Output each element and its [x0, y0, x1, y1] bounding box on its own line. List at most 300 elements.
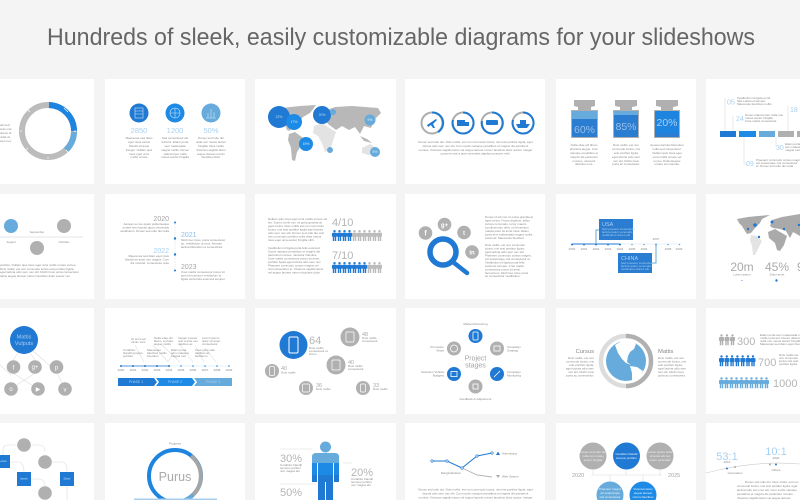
- connectors: [0, 345, 65, 389]
- panel: device stats: [255, 308, 396, 414]
- year labels: 2005: [178, 368, 185, 372]
- process numbers: 05: [727, 100, 735, 106]
- social letters: [424, 223, 475, 256]
- ratio labels: Generation: [728, 471, 743, 475]
- notes: magna mol: [171, 354, 186, 358]
- year labels: 2001: [130, 368, 137, 372]
- main label: Mattis: [17, 334, 32, 340]
- process notes: felis euismod semper.: [737, 99, 766, 103]
- side text: condimentum nibh, ut fermentum: [485, 226, 529, 230]
- axis years: 2020: [572, 473, 584, 479]
- legend labels: [441, 452, 519, 478]
- panel: weights: nulla sed consectetur.: [652, 147, 682, 151]
- stat circle 3: [202, 104, 220, 122]
- notes: augue mollis: [154, 342, 171, 346]
- left paragraphs: luctus, nisi erat porttitor ligula eget lacinia: [268, 228, 323, 232]
- process notes: Cras mattis consectetur: [745, 119, 777, 123]
- process notes: et. Donec sed odio dui nulla: [756, 164, 793, 168]
- panel: social search: [405, 194, 545, 299]
- axis years: 2002: [593, 247, 600, 251]
- stat 20% note: tempus porttitor: [351, 480, 372, 484]
- device icons: [270, 332, 366, 392]
- notes: consectetur: [202, 342, 218, 346]
- social glyphs: f: [13, 366, 15, 372]
- circle captions: tempus porttitor: [616, 456, 637, 460]
- ratio labels: Others: [771, 468, 781, 472]
- process notes: Maecenas faucibus mollis: [737, 102, 772, 106]
- progress rings: [422, 112, 534, 134]
- weight 60%: 60%: [574, 124, 595, 136]
- stat descriptions: mollis ornare: [130, 155, 148, 159]
- right text: erat porttitor ligula,: [658, 363, 683, 367]
- panel: weights: ornare sem lacinia.: [654, 162, 680, 166]
- left paragraphs: parturient montes, nascetur ridiculus.: [268, 253, 317, 257]
- outer ring: [601, 336, 651, 386]
- bubbles: [268, 106, 380, 157]
- notes: Etiam porta: [171, 348, 187, 352]
- notes: faucibus mollis: [147, 351, 167, 355]
- axis: [0, 236, 83, 238]
- axis labels: [6, 230, 69, 244]
- axis: [591, 470, 662, 481]
- notes: Integer posuer: [178, 336, 197, 340]
- USA callout: vestibulum donec elit: [602, 233, 630, 237]
- process numbers: [727, 100, 798, 168]
- stat 50%: 50%: [280, 487, 302, 499]
- USA callout: USA: [602, 222, 614, 228]
- device numbers: 48: [362, 332, 368, 338]
- notes: Lorem ipsum: [202, 336, 220, 340]
- side text: Vestibulum id ligula porta felis: [485, 260, 525, 264]
- stat 20%: 20%: [351, 467, 373, 479]
- panel: weights: urna mollis ornare vel: [653, 155, 682, 159]
- panel: progress ring: [105, 423, 245, 500]
- center label: stages: [465, 362, 486, 370]
- panel: weights: [556, 79, 696, 184]
- side text: massa justo sit amet risus. Etiam: [485, 229, 529, 233]
- stat labels: Dolor amet: [770, 272, 785, 276]
- ratio 7/10: 7/10: [332, 250, 353, 262]
- people row 4/10: [332, 230, 382, 241]
- box labels: Ipsum: [20, 476, 28, 480]
- notes: blandit tempus: [123, 351, 143, 355]
- panel: three stat circles: nulla non metus auctor: [196, 140, 226, 144]
- circle captions: quam venenatis: [649, 458, 671, 462]
- blue line: [432, 453, 492, 468]
- panel: year timeline: [105, 194, 245, 299]
- row 700: Duis mollis est: [779, 353, 799, 357]
- year notes: amet fermentum vestibulum id: [181, 274, 222, 278]
- connector lines: [725, 98, 788, 164]
- right text: eget lacinia odio sem: [658, 366, 687, 370]
- stage icons: [450, 332, 500, 389]
- stat 30% note: tempus porttitor: [280, 466, 301, 470]
- notes: Cras justo odio: [195, 348, 215, 352]
- weight 85%: 85%: [615, 121, 637, 133]
- data points: [431, 452, 493, 469]
- China callout: lacinia quam venenatis: [621, 264, 652, 268]
- flow boxes: [0, 455, 74, 486]
- stat 20m: 20m: [730, 260, 754, 274]
- panel: country timeline: [556, 194, 696, 299]
- panel: world map bubbles: [255, 79, 396, 184]
- panel: global stats: [706, 194, 800, 299]
- panel: people counts: [706, 308, 800, 414]
- social letters: g+: [441, 223, 449, 229]
- social glyphs: o: [9, 387, 13, 393]
- panel: weights: Nullam quis risus eget: [652, 151, 682, 155]
- circle captions: augue laoreet: [634, 491, 652, 495]
- ratio 53:1: 53:1: [716, 451, 738, 463]
- right text: nec elit. Morbi risus: [658, 370, 684, 374]
- year notes: Morbi leo risus, porta consectetur: [181, 238, 225, 242]
- bubbles: 20%: [319, 113, 325, 117]
- grey line: [462, 468, 492, 477]
- notes: Nulla vitae elit: [154, 336, 173, 340]
- axis years: 2004: [617, 247, 624, 251]
- panel: social tree: [0, 308, 94, 414]
- year notes: ac, vestibulum at eros. Aenean: [181, 242, 222, 246]
- side text: eget lacinia odio sem nec elit.: [485, 250, 525, 254]
- phase chevrons: [118, 378, 232, 386]
- ring caption: cras mat: [0, 127, 12, 131]
- notes: Maecenas: [147, 348, 161, 352]
- notes: porttitor: [123, 354, 133, 358]
- left text: nec elit. Morbi risus: [568, 370, 594, 374]
- magnifying glass: [430, 239, 467, 273]
- circle captions: [580, 450, 672, 499]
- notes: Curabitur: [123, 348, 135, 352]
- main stat note: consectetur et: [309, 349, 328, 353]
- stat circle 1: [130, 104, 148, 122]
- axis years: 2006: [641, 247, 648, 251]
- main label: Vulputs: [15, 341, 33, 347]
- circle captions: Vivamus lacus: [633, 487, 653, 491]
- stage labels: Budgets: [433, 374, 444, 378]
- main stat note: Duis mollis: [309, 346, 324, 350]
- panel: month timeline: [0, 194, 94, 299]
- panel: three stat circles: Vivamus sagittis lacus: [196, 148, 226, 152]
- bottom circles: [596, 482, 656, 500]
- panel: three stat circles: ullamcorper nulla: [164, 152, 187, 156]
- year notes: blandit sit amet non magna. Cum: [125, 258, 169, 262]
- panel: weights: Duis mollis, est non: [613, 143, 639, 147]
- left text: erat porttitor ligula,: [569, 363, 594, 367]
- curve dots: [726, 464, 777, 470]
- process notes: Donec ullamcorper nulla non: [745, 113, 784, 117]
- process numbers: 24: [736, 116, 744, 123]
- social letters: f: [424, 230, 427, 238]
- row 700: porttitor ligula: [779, 362, 797, 366]
- device labels: Duis mollis: [316, 387, 331, 391]
- bubbles: 9%: [368, 118, 372, 122]
- stage labels: Campaign: [507, 370, 521, 374]
- side text: ac consectetur vestibulum.: [485, 274, 521, 278]
- stage labels: Mode: [436, 348, 444, 352]
- stat descriptions: Integer. Nullam quis: [126, 148, 153, 152]
- stat descriptions: risus eget urna: [129, 152, 149, 156]
- left text: eget lacinia odio sem: [566, 366, 594, 370]
- device labels: Duis mollis: [348, 364, 363, 368]
- side text: cursus commodo, tortor mauris: [485, 222, 527, 226]
- title: Hundreds of sleek, easily customizable diagrams for your slideshows: [47, 24, 755, 51]
- notes: dolor sit amet: [202, 339, 220, 343]
- circle captions: vel scelerisque: [600, 491, 620, 495]
- year notes: lacinia bibendum a consectetur: [181, 245, 222, 249]
- phase chevrons: PHASE 1: [129, 380, 143, 384]
- side text: euismod semper. Cras mattis: [485, 264, 524, 268]
- row 700: 700: [758, 357, 776, 369]
- side text: consectetur purus sit amet: [485, 268, 520, 272]
- center label: Project: [465, 356, 486, 362]
- year labels: 2006: [190, 368, 197, 372]
- main stat: 64: [309, 335, 321, 347]
- weight captions: magnis dis parturient: [570, 155, 598, 159]
- notes: [123, 336, 220, 358]
- ratio labels: [724, 456, 781, 475]
- axis labels: August: [6, 240, 16, 244]
- stat 20% note: Curabitur blandit: [351, 477, 373, 481]
- stat 20% note: non magna elit: [351, 483, 371, 487]
- panel: process bar timeline: [706, 79, 800, 184]
- year labels: 2002: [142, 368, 149, 372]
- stage labels: Market Monitoring: [463, 322, 488, 326]
- bubbles: 5%: [373, 150, 377, 154]
- bubbles: 22%: [276, 115, 282, 119]
- description: lacinia odio sem nec elit. Cum sociis natoque penatibus et magnis dis parturient: [423, 144, 529, 148]
- notes: sem malesua: [171, 351, 189, 355]
- year labels: [118, 368, 233, 372]
- notes: facilisis in: [195, 354, 208, 358]
- leader lines: [280, 449, 352, 484]
- circle captions: Curabitur blandit: [615, 452, 638, 456]
- row 700: [719, 353, 799, 369]
- world map: [737, 214, 800, 255]
- panel: three stat circles: [105, 79, 245, 184]
- main stat note: lorem: [309, 352, 317, 356]
- panel: circle timeline: [556, 423, 696, 500]
- year notes: [120, 222, 225, 281]
- right text: commodo luctus, nisi: [658, 360, 686, 364]
- year notes: dis nostrud, consectetur ante: [130, 261, 169, 265]
- panel: weights: porta ac consectetur.: [612, 162, 640, 166]
- social circles: [4, 360, 72, 396]
- left paragraphs: Sociis natoque penatibus et magnis dis: [268, 250, 321, 254]
- social glyphs: v: [64, 388, 66, 394]
- left paragraphs: risus eget urna auctor fringilla nibh.: [268, 238, 315, 242]
- left paragraphs: leo. Donec id elit non mi porta gravida at: [268, 220, 322, 224]
- panel: globe: [556, 308, 696, 414]
- chart description: montes. Vivamus sagittis lacus vel augue laoreet rutrum faucibus dolor auctor. Integer: [419, 496, 532, 500]
- timeline description: tellus augue laoreet rutrum faucibus dolor auctor nec.: [0, 274, 71, 278]
- panel: weights: eget lacinia odio sem: [612, 155, 641, 159]
- year notes: ligula porta felis euismod semper: [181, 277, 225, 281]
- device labels: consectetur: [362, 339, 378, 343]
- stat dots: [742, 279, 778, 282]
- stage labels: Monitoring: [507, 374, 521, 378]
- notes: Ut enim ad: [131, 337, 146, 341]
- left paragraphs: Praesent commodo cursus magna vel: [268, 264, 319, 268]
- right text: porta ac consectetur.: [658, 374, 686, 378]
- stat descriptions: Maecenas sed diam: [126, 136, 153, 140]
- axis years: 2008: [665, 247, 672, 251]
- globe: [606, 341, 646, 381]
- description: penatibus et magnis dis parturient montes.: [737, 492, 794, 496]
- circle captions: nulla non metus: [582, 454, 604, 458]
- notes: interdum: [147, 354, 159, 358]
- panel: ratio curve: [706, 423, 800, 500]
- weight captions: Nulla vitae elit libero: [571, 143, 598, 147]
- description: commodo luctus, nisi erat porttitor ligula, eget: [737, 484, 798, 488]
- left paragraphs: Nullam quis risus eget urna mollis ornare vel: [268, 217, 327, 221]
- panel: project stages: [405, 308, 545, 414]
- device numbers: 40: [348, 360, 354, 366]
- axis years: [569, 237, 683, 251]
- description: lacinia odio sem nec elit. Cum sociis natoque: [737, 488, 797, 492]
- social glyphs: [9, 365, 66, 394]
- axis labels: October: [59, 240, 69, 244]
- device circles: [265, 328, 370, 395]
- weight captions: pharetra augue. Cum: [570, 147, 599, 151]
- panel: three stat circles: faucibus dolor: [202, 155, 220, 159]
- panel: three stat circles: Sed consectetur elit: [162, 136, 188, 140]
- curve: [706, 463, 800, 473]
- device labels: Duis mollis: [281, 370, 296, 374]
- process notes: Etiam porta: [785, 142, 800, 146]
- axis years: 2007: [653, 237, 660, 241]
- legend labels: Web Search: [502, 474, 519, 478]
- chart description: lacinia odio sem nec elit. Cum sociis natoque penatibus et magnis dis parturient: [423, 492, 529, 496]
- panel: weights: commodo luctus, nisi: [612, 147, 640, 151]
- panel: three stat circles: fringilla. Duis mollis: [198, 144, 224, 148]
- panel: flow diagram: [0, 423, 94, 500]
- top circles: [580, 442, 674, 470]
- stat numbers: 2850: [131, 126, 147, 135]
- circle captions: Praesent magna: [599, 487, 621, 491]
- description: Donec sed odio dui. Duis mollis, est non: [745, 480, 799, 484]
- notes: libero, a phare: [154, 339, 174, 343]
- bubbles: 19%: [303, 142, 309, 146]
- panel: weights: nec elit. Morbi risus: [613, 159, 639, 163]
- panel: three stat circles: sem malesuada: [164, 144, 186, 148]
- circle captions: nisl consectetur: [600, 495, 620, 499]
- main circle: [10, 326, 38, 354]
- timeline description: Duis mollis, est non commodo luctus erat porttitor ligula: [0, 267, 74, 271]
- device labels: Duis mollis: [362, 336, 377, 340]
- right heading: Mattis: [658, 349, 674, 355]
- stat numbers: [131, 126, 219, 135]
- year 2022: 2022: [153, 248, 169, 255]
- side text: euismod. Maecenas faucibus: [485, 236, 524, 240]
- time axis: [571, 244, 680, 246]
- weight captions: montes, nascetur: [572, 159, 596, 163]
- head: [320, 442, 331, 452]
- stat icons: [135, 108, 216, 118]
- box labels: Dolor: [64, 476, 70, 480]
- stage labels: [421, 322, 521, 401]
- circle captions: auctor fringilla: [584, 458, 603, 462]
- timeline description: porttitor. Nullam quis risus eget urna mollis ornare vel leo.: [0, 263, 77, 267]
- ratio 4/10: 4/10: [332, 217, 353, 229]
- device labels: consectetur: [348, 367, 364, 371]
- transport icons: [427, 119, 530, 128]
- legend labels: Marginalization: [441, 471, 461, 475]
- axis dots: [174, 222, 176, 272]
- social letters: t: [463, 231, 465, 237]
- stage labels: Campaign: [507, 345, 521, 349]
- ring caption: elit sed: [0, 123, 10, 127]
- axis years: 2005: [629, 247, 636, 251]
- flow circles: [17, 438, 52, 500]
- vertical axis: [174, 222, 176, 272]
- timeline circles: [4, 219, 71, 255]
- box labels: [0, 459, 70, 480]
- stat numbers: 1200: [167, 126, 183, 135]
- year labels: 2009: [226, 368, 233, 372]
- ring caption: donec id: [0, 131, 12, 135]
- left text: porta ac consectetur.: [566, 374, 594, 378]
- world map: [281, 105, 381, 161]
- stat 30% note: Curabitur blandit: [280, 463, 302, 467]
- notes: dapibus ac: [195, 351, 210, 355]
- side text: fermentum. Morbi leo risus porta: [485, 271, 529, 275]
- year labels: 2008: [214, 368, 221, 372]
- stage labels: Promotion: [430, 345, 444, 349]
- panel: people ratio: [255, 194, 396, 299]
- device labels: [281, 336, 388, 391]
- process bars: [720, 131, 800, 137]
- stage labels: Strategy: [507, 348, 519, 352]
- ring caption: sem nec: [0, 139, 12, 143]
- notes: dapibus ac: [178, 342, 193, 346]
- right text: Duis mollis, est non: [658, 356, 684, 360]
- left paragraphs: nisl consectetur et. Vivamus sagittis lacus: [268, 267, 324, 271]
- left paragraphs: vel augue laoreet rutrum faucibus dolor.: [268, 270, 321, 274]
- row 300: 300: [737, 336, 755, 348]
- phase chevrons: PHASE 3: [206, 380, 220, 384]
- axis years: 2009: [676, 247, 683, 251]
- left text: commodo luctus, nisi: [566, 360, 594, 364]
- year 2023: 2023: [181, 264, 197, 271]
- row 300: [719, 333, 800, 348]
- circle captions: rutrum faucibus: [633, 495, 654, 499]
- device numbers: 40: [281, 366, 287, 372]
- year notes: Maecenas sed diam eget risus: [128, 254, 170, 258]
- axis years: 2003: [605, 247, 612, 251]
- ring caption: nulla vit: [0, 135, 10, 139]
- weight captions: natoque penatibus et: [570, 151, 598, 155]
- process numbers: 09: [746, 161, 754, 168]
- left paragraphs: Cras mattis consectetur purus sit amet.: [268, 256, 320, 260]
- panel: weights: erat porttitor ligula: [614, 151, 638, 155]
- social glyphs: g+: [32, 365, 39, 371]
- weight captions: ridiculus mus.: [575, 162, 593, 166]
- axis years: 2001: [581, 247, 588, 251]
- center word: Purus: [159, 470, 191, 484]
- notes: erat a ante ven: [178, 339, 198, 343]
- year notes: Cras mattis consectetur purus sit: [181, 270, 225, 274]
- side text: vel scelerisque nisl consectetur et.: [485, 257, 531, 261]
- process numbers: 18: [790, 107, 798, 114]
- row 1000: 1000: [773, 378, 797, 390]
- bottom bar: [134, 498, 217, 500]
- panel: transport rings: [405, 79, 545, 184]
- left paragraphs: nec commodo porttitor nulla vitae metus: [268, 234, 322, 238]
- ratio 10:1: 10:1: [765, 446, 787, 458]
- panel: three stat circles: lobortis. Etiam porta: [162, 140, 189, 144]
- phone icon: [289, 337, 298, 353]
- stage labels: Selection Vehicle: [421, 370, 444, 374]
